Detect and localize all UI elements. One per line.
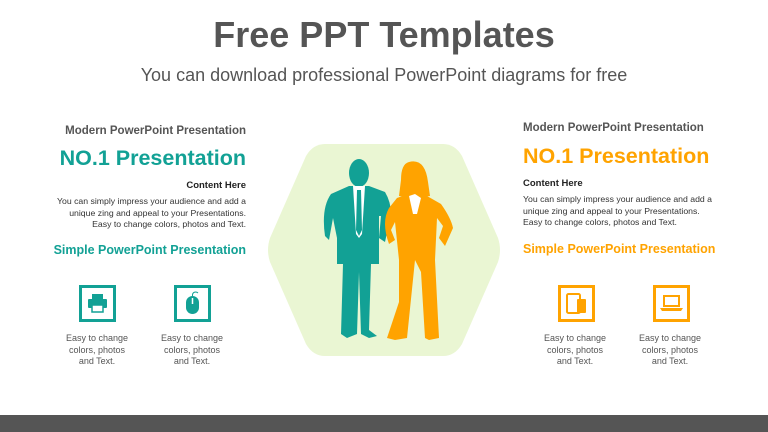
right subheading: Modern PowerPoint Presentation [523,122,704,134]
left content label: Content Here [186,180,246,191]
panel: left [54,125,246,257]
footer bar [0,415,768,432]
caption 2: Easy to change colors, photos and Text. [161,333,223,366]
icon: tablet/phone [558,285,595,322]
left heading: NO.1 Presentation [60,146,246,170]
right content label: Content Here [523,178,583,189]
icon: printer [79,285,116,322]
icon: mouse [174,285,211,322]
right heading: NO.1 Presentation [523,144,709,168]
central hexagon with silhouettes [268,144,500,356]
caption 1: Easy to change colors, photos and Text. [66,333,128,366]
subtitle: You can download professional PowerPoint diagrams for free [141,65,627,85]
icon: laptop [653,285,690,322]
right body: You can simply impress your audience and add a unique zing and appeal to your Presentations. Easy to change colors, photos and Text. [523,194,712,227]
woman silhouette [385,161,453,340]
hexagon [268,144,500,356]
caption 3: Easy to change colors, photos and Text. [544,333,606,366]
left body: You can simply impress your audience and add a unique zing and appeal to your Presentations. Easy to change colors, photos and Text. [57,196,246,229]
left subheading: Modern PowerPoint Presentation [65,125,246,137]
right simple heading: Simple PowerPoint Presentation [523,242,715,256]
title: Free PPT Templates [213,14,555,55]
caption 4: Easy to change colors, photos and Text. [639,333,701,366]
panel: right [523,122,715,256]
left simple heading: Simple PowerPoint Presentation [54,243,246,257]
man silhouette [324,159,391,338]
